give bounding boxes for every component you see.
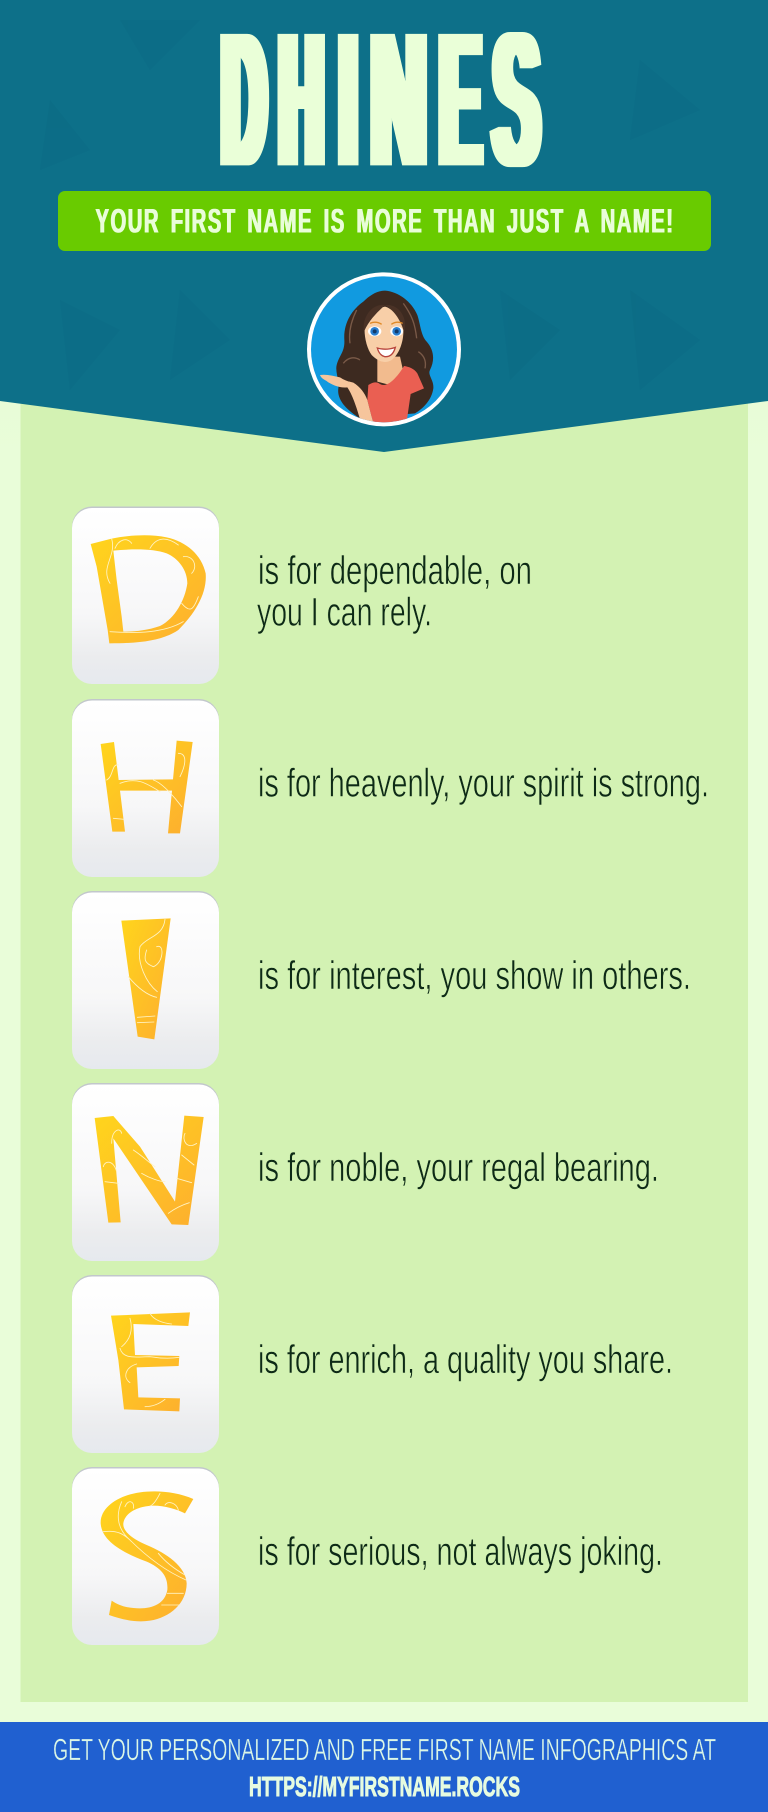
header banner [0, 0, 768, 452]
letter D [91, 535, 206, 643]
text: D line [257, 549, 532, 634]
text: D line: you I can rely. [257, 590, 432, 634]
title [222, 0, 539, 206]
letter I [121, 918, 171, 1039]
letter card: S [72, 1467, 219, 1645]
text: D line: is for dependable, on [258, 549, 532, 593]
tagline bar [58, 191, 711, 251]
footer [0, 1722, 768, 1812]
letter H [101, 741, 193, 833]
letter card: N [72, 1083, 219, 1261]
panel: letters background [20, 395, 748, 1702]
icon: woman portrait in circle [307, 272, 461, 426]
letter card: E [72, 1275, 219, 1453]
letter card: H [72, 699, 219, 877]
letter N [95, 1116, 204, 1225]
footer: HTTPS://MYFIRSTNAME.ROCKS [249, 1771, 520, 1802]
letter card: D [72, 506, 219, 684]
letter S [101, 1491, 193, 1621]
letter E [111, 1312, 190, 1411]
letter card: I [72, 891, 219, 1069]
